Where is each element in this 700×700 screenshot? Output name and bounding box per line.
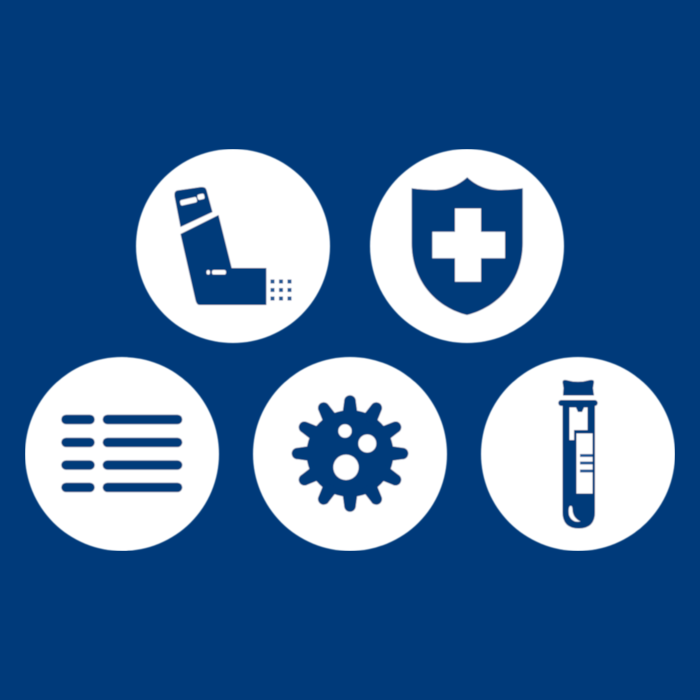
icon: test tube bbox=[481, 357, 675, 551]
icon: virus bbox=[253, 357, 447, 551]
icon: shield with cross bbox=[370, 149, 564, 343]
icon: list bbox=[25, 357, 219, 551]
icon: inhaler bbox=[136, 149, 330, 343]
